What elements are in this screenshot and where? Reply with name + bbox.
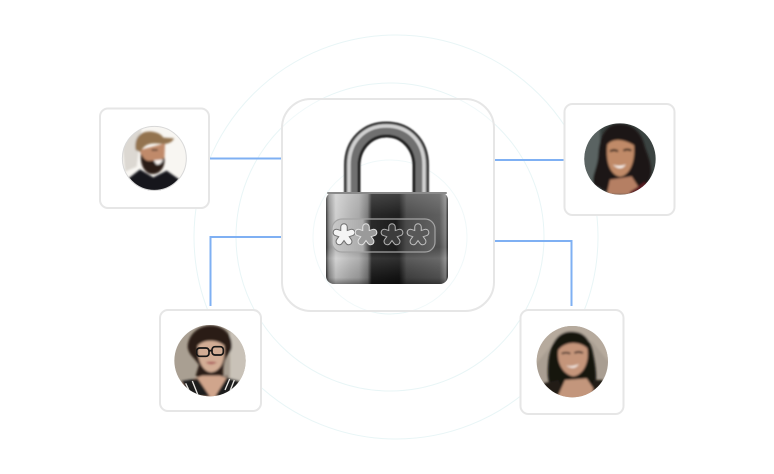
card	[160, 310, 261, 411]
asterisk 2	[358, 227, 374, 242]
connector: bottom left	[210, 237, 282, 306]
concentric rings	[194, 35, 598, 439]
padlock top lip	[327, 192, 447, 194]
padlock body sheen	[326, 192, 448, 284]
panel: bottom left person	[160, 310, 261, 411]
connector: top left	[209, 158, 282, 160]
avatar: woman with glasses	[174, 325, 248, 402]
panel: central lock card	[282, 99, 494, 311]
card	[100, 108, 209, 208]
card	[564, 104, 674, 215]
panel: bottom right person	[520, 310, 624, 414]
avatar: woman with long dark hair	[535, 325, 608, 402]
panel: top right person	[564, 104, 674, 215]
panel: top left person	[100, 108, 209, 208]
connector: top right	[494, 159, 564, 161]
asterisk 3	[384, 227, 400, 242]
icon: padlock	[326, 126, 448, 284]
padlock code plate	[332, 219, 435, 252]
padlock shackle	[349, 126, 424, 196]
asterisk 1	[336, 227, 352, 242]
asterisk 4	[410, 227, 426, 242]
card	[520, 310, 624, 414]
padlock body	[326, 192, 448, 284]
connector: bottom right	[494, 241, 572, 306]
avatar: man in cap	[122, 126, 187, 197]
avatar: woman with dark hair	[583, 123, 656, 195]
